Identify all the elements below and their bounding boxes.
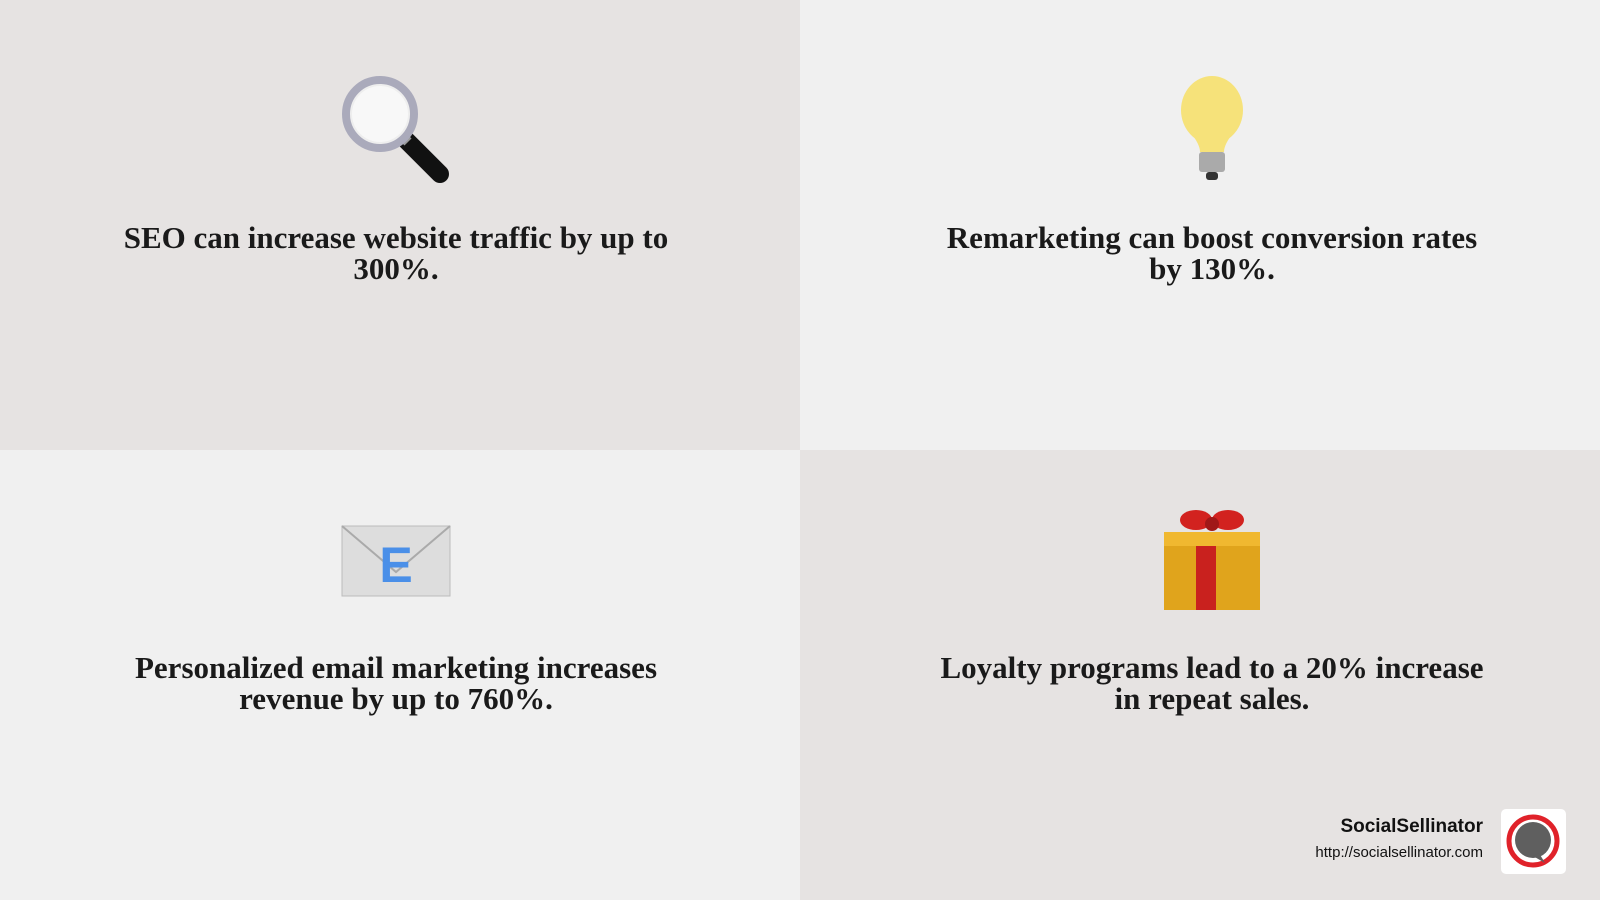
text: SEO stat: SEO can increase website traffic by up to [124, 220, 668, 255]
text: email stat: Personalized email marketing increases [135, 650, 657, 685]
icon: envelope: E [379, 537, 413, 593]
logo [1501, 809, 1566, 874]
text: SEO stat: 300%. [353, 251, 439, 286]
text: remarketing stat [947, 220, 1477, 286]
icon: gift [1164, 510, 1260, 610]
panel: remarketing [800, 0, 1600, 450]
brand text: http://socialsellinator.com [1315, 844, 1483, 861]
text: remarketing stat: Remarketing can boost conversion rates [947, 220, 1477, 255]
icon: magnifying glass [342, 76, 449, 183]
brand text [1315, 816, 1483, 861]
text: loyalty stat: in repeat sales. [1115, 681, 1309, 716]
text: remarketing stat: by 130%. [1149, 251, 1275, 286]
panel: loyalty [800, 450, 1600, 900]
text: loyalty stat: Loyalty programs lead to a 20% increase [940, 650, 1484, 685]
text: email stat [135, 650, 657, 716]
icon: light bulb [1181, 76, 1243, 180]
panel: SEO [0, 0, 800, 450]
panel: email [0, 450, 800, 900]
brand text: SocialSellinator [1340, 816, 1483, 837]
text: loyalty stat [940, 650, 1484, 716]
text: email stat: revenue by up to 760%. [239, 681, 553, 716]
text: SEO stat [124, 220, 668, 286]
icon: envelope [342, 525, 450, 596]
